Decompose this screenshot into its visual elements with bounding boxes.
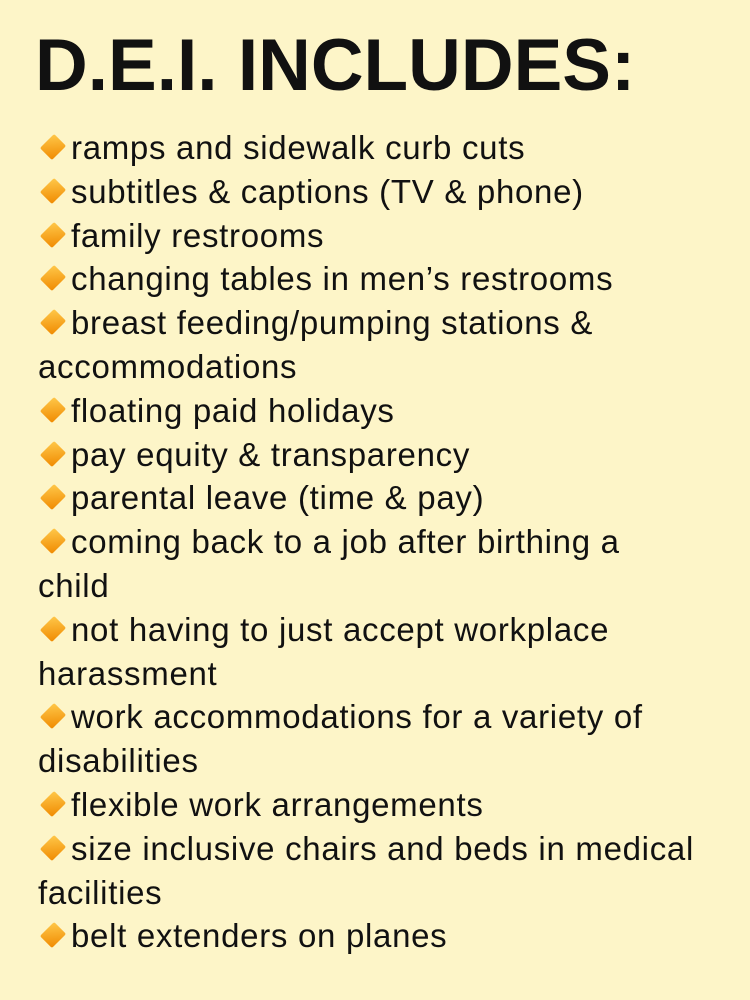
list of items: ramps and sidewalk curb cuts: [71, 129, 525, 166]
list of items: belt extenders on planes: [71, 917, 447, 954]
list of items: breast feeding/pumping stations &: [71, 304, 593, 341]
list of items: size inclusive chairs and beds in medical: [71, 830, 694, 867]
list of items: disabilities: [38, 742, 199, 779]
list of items: not having to just accept workplace: [71, 611, 609, 648]
list of items: pay equity & transparency: [71, 436, 470, 473]
list of items: family restrooms: [71, 217, 324, 254]
list of items: coming back to a job after birthing a: [71, 523, 620, 560]
list of items: facilities: [38, 874, 162, 911]
list of items: accommodations: [38, 348, 297, 385]
list of items: floating paid holidays: [71, 392, 395, 429]
list of items: [38, 129, 694, 954]
list of items: changing tables in men’s restrooms: [71, 260, 613, 297]
list of items: flexible work arrangements: [71, 786, 484, 823]
list of items: child: [38, 567, 109, 604]
list of items: harassment: [38, 655, 217, 692]
list of items: subtitles & captions (TV & phone): [71, 173, 584, 210]
list of items: work accommodations for a variety of: [71, 698, 643, 735]
list of items: parental leave (time & pay): [71, 479, 484, 516]
title: D.E.I. INCLUDES:: [35, 25, 635, 106]
